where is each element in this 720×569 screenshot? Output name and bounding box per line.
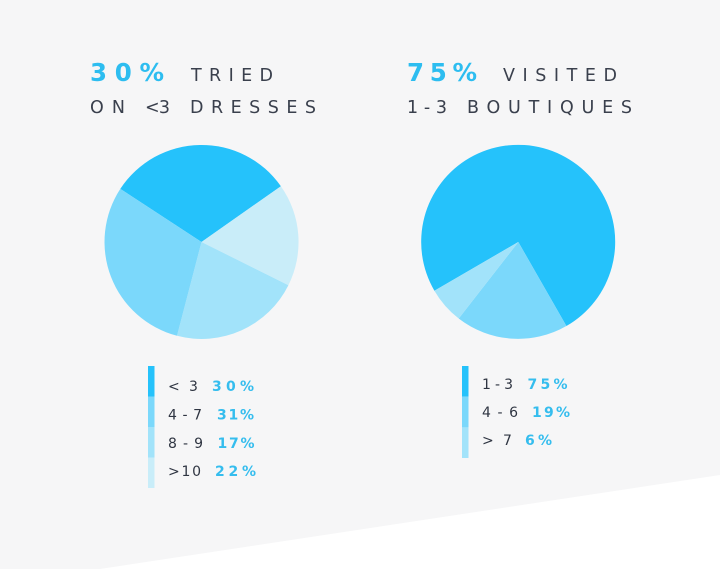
legend: dresses tried on: 31%: [217, 408, 254, 424]
legend: boutiques visited: 75%: [528, 377, 568, 393]
legend: boutiques visited: 19%: [532, 405, 570, 421]
pie chart: dresses tried on: [105, 145, 299, 339]
heading: 30% tried on <3 dresses: [90, 58, 316, 118]
heading: 75% visited 1-3 boutiques: BOUTIQUES: [467, 98, 632, 118]
legend: boutiques visited: 4 - 6: [482, 405, 518, 421]
heading: 75% visited 1-3 boutiques: 75%: [407, 58, 477, 87]
heading: 30% tried on <3 dresses: DRESSES: [190, 98, 316, 118]
pie chart: boutiques visited: [421, 145, 615, 339]
heading: 30% tried on <3 dresses: ON: [90, 98, 125, 118]
heading: 30% tried on <3 dresses: TRIED: [190, 66, 273, 86]
legend: dresses tried on: 3: [189, 379, 198, 395]
heading: 75% visited 1-3 boutiques: 1-3: [407, 98, 447, 118]
legend: dresses tried on: >10: [168, 464, 201, 480]
legend: dresses tried on: 22%: [215, 464, 256, 480]
heading: 30% tried on <3 dresses: <3: [145, 98, 170, 118]
legend: dresses tried on: 8 - 9: [168, 436, 203, 452]
legend: dresses tried on: 17%: [218, 436, 254, 452]
legend: boutiques visited: >: [482, 433, 494, 449]
legend: boutiques visited: 1 - 3: [482, 377, 513, 393]
legend: boutiques visited: 6%: [525, 433, 552, 449]
heading: 75% visited 1-3 boutiques: [407, 58, 632, 118]
legend: dresses tried on: 30%: [212, 379, 254, 395]
heading: 30% tried on <3 dresses: 30%: [90, 58, 164, 87]
legend: dresses tried on: <: [168, 379, 180, 395]
legend: boutiques visited: [462, 366, 570, 458]
legend: dresses tried on: 4 - 7: [168, 408, 202, 424]
heading: 75% visited 1-3 boutiques: VISITED: [503, 66, 617, 86]
legend: boutiques visited: 7: [503, 433, 512, 449]
legend: dresses tried on: [148, 366, 256, 488]
